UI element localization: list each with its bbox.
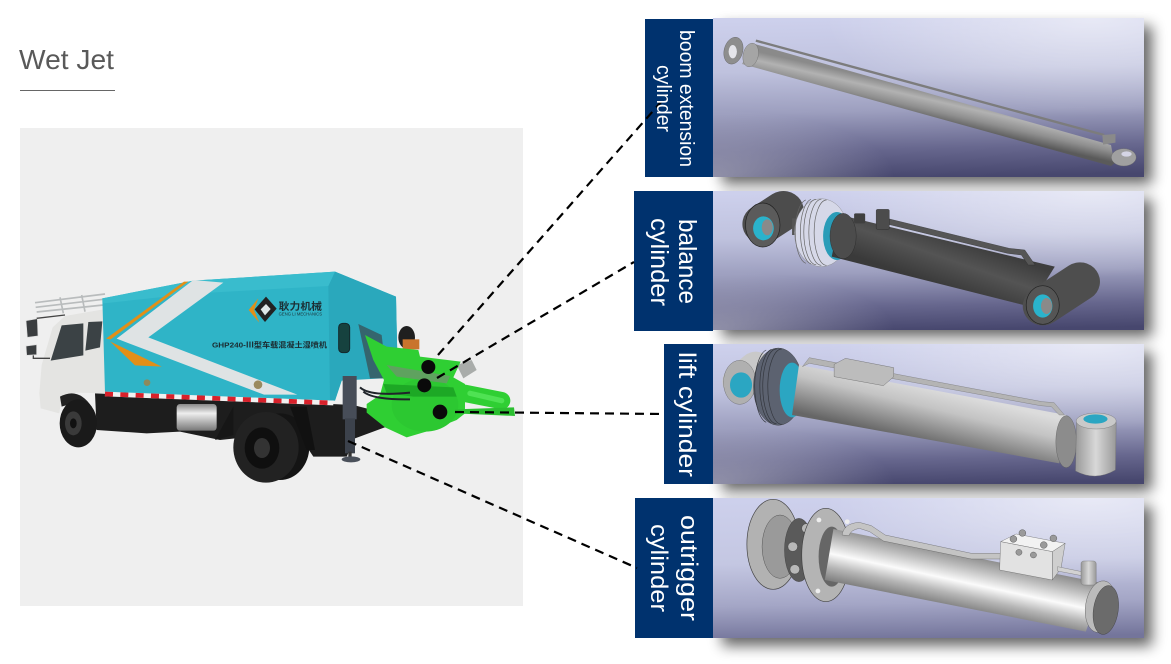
wing mirror [26,319,38,355]
shadow: cylinder panels [722,26,1152,646]
logo: GENG LI MECHANICS [279,311,322,316]
mud flap [215,407,233,440]
green spraying unit [365,335,515,437]
chassis [95,393,392,457]
truck illustration [26,272,515,483]
label text: lift cylinder: lift cylinder [673,352,700,477]
rear wheel [233,412,309,483]
label text: balance cylinder: balance [673,219,701,304]
logo: 耿力机械 [279,300,322,313]
panel: lift cylinder [713,344,1144,484]
label text: boom extension cylinder: boom extension [675,30,697,167]
spare tyre [398,326,415,349]
panel: boom extension cylinder [713,18,1144,177]
label text: boom extension cylinder: cylinder [652,65,674,132]
label text: balance cylinder: cylinder [645,218,673,306]
rear hatch [358,324,387,378]
label: outrigger cylinder [635,498,713,638]
cylinder drawing: lift [723,348,1116,476]
title underline [20,90,115,91]
label: lift cylinder [664,344,713,484]
model text: GHP240-Ⅲ型车载混凝土湿喷机 [212,340,327,350]
leader lines [348,102,664,568]
grey nozzle [457,360,477,378]
panel: balance cylinder [713,191,1144,330]
logo [249,297,322,323]
cylinder drawing: outrigger [747,499,1122,636]
orange stripes [106,282,188,367]
cab [39,309,105,413]
body hatch [339,323,350,353]
title: Wet Jet [19,44,114,75]
body side shade [328,272,397,401]
body badges [254,380,262,389]
label: boom extension cylinder [645,19,713,177]
cylinder drawing: boom extension [721,35,1136,166]
marker dots [417,360,447,419]
outrigger leg [342,376,360,462]
roof rack [35,294,105,313]
label text: outrigger cylinder: cylinder [645,524,672,612]
label text: balance cylinder [645,218,701,306]
panel: outrigger cylinder [713,498,1144,638]
front wheel fender [60,393,97,430]
label: balance cylinder [634,191,713,331]
panel: truck photo background [20,128,523,606]
teal body [102,272,397,401]
reflective strip [105,394,333,403]
cylinder drawing: balance [746,199,1080,324]
label text: outrigger cylinder: outrigger [675,515,702,621]
label text: outrigger cylinder [645,515,702,621]
cab windows [51,321,102,361]
white chevron [117,280,297,395]
label text: boom extension cylinder [652,30,697,167]
fuel tank [177,404,217,431]
top lip [102,272,335,303]
hydraulic hoses [360,387,410,399]
rear fender [290,407,315,450]
front wheel [60,399,97,447]
